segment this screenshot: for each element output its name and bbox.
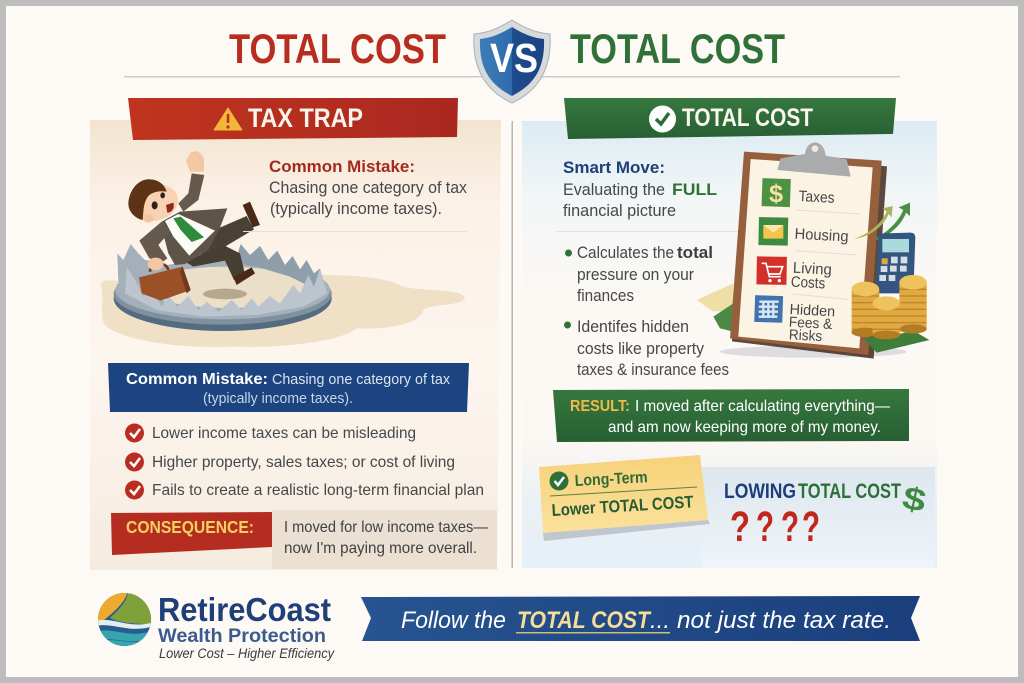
lower band (701, 467, 935, 568)
row: taxes: Taxes (798, 188, 835, 207)
footer banner (361, 596, 920, 641)
text block: smart move: financial picture (563, 202, 676, 220)
text block: common mistake: Common Mistake: (269, 157, 415, 176)
text block: smart move: Evaluating the (563, 181, 665, 199)
result bar: I moved after calculating everything— (635, 398, 890, 415)
icon: VS shield (474, 20, 550, 103)
banner: tax trap (128, 98, 458, 140)
sticky note: long-term (539, 455, 710, 541)
heading: lowing total cost: $ (899, 479, 930, 519)
text block: smart move: FULL (672, 180, 717, 199)
icon: VS shield: VS (490, 35, 538, 81)
briefcase (139, 264, 191, 301)
bullet list (564, 244, 729, 379)
consequence label (111, 512, 272, 555)
logo mark (98, 593, 151, 646)
bullet 2: taxes & insurance fees (577, 361, 729, 379)
consequence text: now I'm paying more overall. (284, 540, 477, 557)
panel: total cost (522, 98, 937, 568)
row: housing: Housing (794, 226, 849, 245)
row: living costs (756, 256, 832, 292)
footer logo: Lower Cost – Higher Efficiency (159, 646, 335, 661)
row: hidden fees and risks: Fees & (788, 315, 833, 333)
text block: smart move (563, 158, 717, 220)
icon: note check (550, 472, 568, 490)
question marks (730, 503, 820, 551)
title: right: TOTAL COST (570, 25, 785, 72)
question marks: ? (802, 503, 820, 551)
consequence text: I moved for low income taxes— (284, 519, 488, 536)
result bar (553, 389, 909, 442)
bullet 2: costs like property (577, 340, 705, 358)
title: left: TOTAL COST (229, 25, 446, 72)
text block: common mistake (269, 157, 468, 218)
callout: common mistake (108, 363, 469, 412)
list item 3: Fails to create a realistic long-term financial plan (152, 482, 484, 499)
icon: check circle (649, 106, 676, 132)
bullet 1: total (677, 244, 713, 262)
consequence text (284, 519, 488, 557)
footer banner: TOTAL COST (517, 607, 652, 634)
icon: calculator (876, 233, 915, 293)
list item 2: Higher property, sales taxes; or cost of living (152, 454, 455, 471)
question marks: ? (781, 503, 799, 551)
bullet 1: pressure on your (577, 266, 694, 284)
clipboard (730, 142, 887, 359)
icon: growth arrows (854, 203, 910, 240)
row: taxes: $ (769, 180, 783, 208)
trap (114, 244, 332, 331)
banner: total cost (564, 98, 896, 139)
bullet 1 (565, 244, 713, 305)
bullet 1: Calculates the (577, 244, 674, 262)
bullet 1: finances (577, 287, 634, 305)
row: housing (758, 217, 849, 246)
panel background (522, 121, 937, 568)
illustration: clipboard with money (697, 142, 929, 359)
row: hidden fees and risks: Risks (788, 327, 823, 345)
footer logo (96, 590, 335, 661)
row: living costs: Costs (790, 274, 826, 292)
banknotes (697, 283, 907, 358)
heading: lowing total cost: TOTAL COST (798, 480, 901, 503)
question marks: ? (730, 503, 750, 551)
footer logo: RetireCoast (158, 591, 331, 628)
text block: common mistake: (typically income taxes). (270, 200, 442, 218)
heading: lowing total cost: LOWING (724, 480, 796, 503)
businessman (128, 151, 260, 285)
callout: common mistake: Chasing one category of tax (272, 371, 450, 388)
row: hidden fees and risks (754, 295, 836, 345)
icon: warning triangle (214, 108, 242, 130)
callout: common mistake: (typically income taxes). (203, 390, 353, 407)
banner heading: TAX TRAP (248, 103, 363, 133)
footer logo: Wealth Protection (158, 626, 326, 647)
bullet 2: Identifes hidden (577, 318, 689, 336)
row: living costs: Living (792, 260, 832, 279)
result bar: RESULT: (570, 398, 630, 415)
footer banner: not just the tax rate. (677, 607, 891, 634)
callout: common mistake: Common Mistake: (126, 371, 268, 388)
footer banner: Follow the (401, 607, 506, 634)
bullet 2 (564, 318, 729, 379)
illustration: businessman in bear trap (100, 151, 465, 347)
list item 1: Lower income taxes can be misleading (152, 425, 416, 442)
sticky note: long-term: Lower TOTAL COST (551, 492, 695, 520)
header divider (124, 76, 900, 78)
row: hidden fees and risks: Hidden (789, 302, 836, 320)
centre divider (512, 121, 513, 568)
consequence label: CONSEQUENCE: (126, 517, 254, 537)
icon: coin stacks (851, 275, 929, 353)
result bar: and am now keeping more of my money. (608, 419, 881, 436)
consequence bar (111, 510, 497, 569)
sticky note: long-term: Long-Term (574, 469, 648, 490)
row: taxes (762, 178, 835, 208)
footer banner: ... (650, 607, 670, 634)
clip (777, 142, 851, 177)
heading: lowing total cost (724, 479, 930, 519)
sand patch (100, 275, 465, 347)
question marks: ? (756, 503, 774, 551)
checklist (125, 424, 484, 500)
text block: common mistake: Chasing one category of tax (269, 179, 468, 197)
text block: smart move: Smart Move: (563, 158, 665, 177)
panel background (90, 120, 501, 570)
banner heading: TOTAL COST (682, 104, 813, 132)
panel: tax trap (90, 98, 501, 570)
